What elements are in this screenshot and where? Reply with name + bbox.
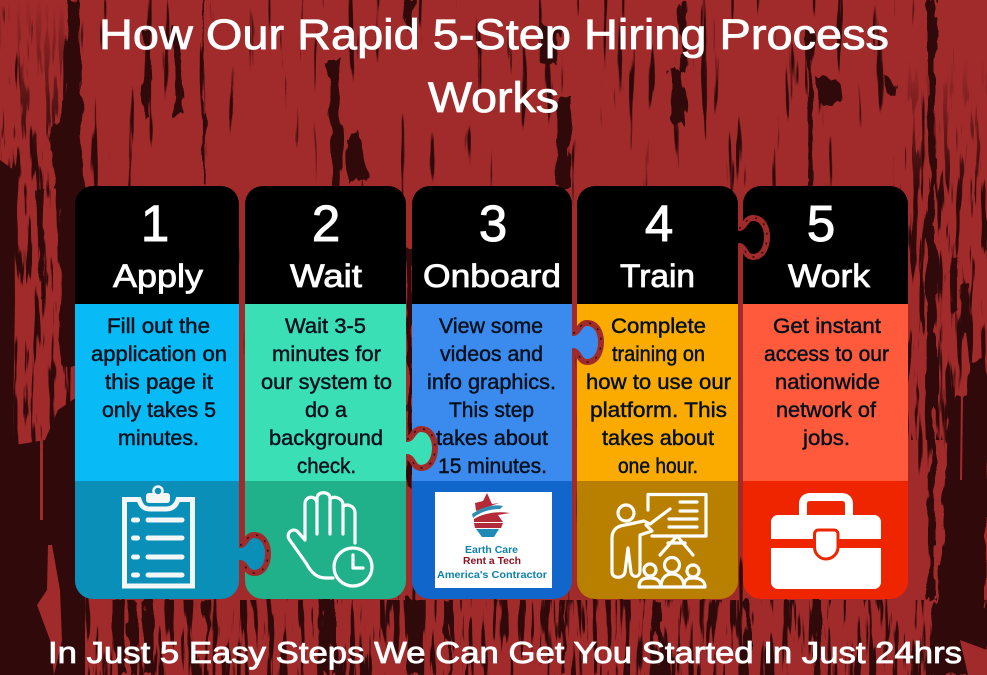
icon: trainer at board with audience [612, 494, 706, 587]
panel 2: wait: do a [305, 399, 347, 422]
panel 4: train: platform. This [590, 399, 727, 422]
panel 5: work: nationwide [775, 371, 880, 394]
icon: company logo: Rent a Tech [463, 555, 521, 567]
panel 3: onboard: videos and [440, 343, 543, 366]
panel 2: wait: minutes for [272, 343, 381, 366]
panel 5: work: Get instant [773, 315, 881, 338]
panel 2: wait: background [269, 427, 383, 450]
panel 2: wait: 2 [312, 195, 340, 252]
panel 2: wait: Wait 3-5 [285, 315, 366, 338]
panel 1: apply: Apply [113, 258, 203, 294]
panel 1: apply: only takes 5 [102, 399, 216, 422]
panel 4: train [577, 186, 738, 599]
icon: toolbox [771, 497, 881, 589]
panel 3: onboard: 15 minutes. [438, 455, 547, 478]
puzzle tab: panel 3 into panel 4 [571, 323, 601, 362]
icon: company logo: America's Contractor [437, 569, 547, 581]
panel 3: onboard: info graphics. [427, 371, 556, 394]
panel 3: onboard: Onboard [423, 258, 561, 294]
panel 4: train: one hour. [618, 455, 698, 478]
panel 3: onboard: takes about [436, 427, 548, 450]
panel 5: work: jobs. [802, 427, 850, 450]
icon: company logo: Earth Care [465, 544, 518, 556]
panel 1: apply: 1 [141, 195, 169, 252]
panel 2: wait [245, 186, 406, 599]
puzzle tab: panel 4 into panel 5 [737, 218, 767, 257]
panel 3: onboard: 3 [479, 195, 507, 252]
puzzle tab: panel 2 into panel 3 [405, 429, 435, 468]
panel 5: work: access to our [764, 343, 889, 366]
panel 5: work: 5 [807, 195, 835, 252]
panel 4: train: Train [620, 258, 695, 294]
panel 3: onboard: This step [449, 399, 534, 422]
panel 4: train: training on [612, 343, 705, 366]
(solid dark band down the left edge) [0, 160, 85, 675]
puzzle tab: panel 1 into panel 2 [238, 535, 268, 573]
panel 4: train: takes about [602, 427, 714, 450]
panel 4: train: 4 [645, 195, 673, 252]
panel 4: train: Complete [611, 315, 706, 338]
panel 1: apply [75, 186, 239, 599]
panel 2: wait: our system to [261, 371, 392, 394]
panel 5: work: network of [776, 399, 876, 422]
panel 1: apply: minutes. [118, 427, 199, 450]
panel 5: work: Work [788, 258, 871, 294]
title [99, 11, 889, 122]
panel 3: onboard: View some [439, 315, 543, 338]
footer tagline: In Just 5 Easy Steps We Can Get You Started In Just 24hrs [48, 635, 962, 670]
panel 4: train: how to use our [586, 371, 731, 394]
panel 2: wait: Wait [290, 258, 362, 294]
icon: clipboard [124, 486, 192, 586]
title: Works [428, 74, 559, 122]
panel 2: wait: check. [297, 455, 356, 478]
icon: company logo [435, 492, 552, 588]
icon: hand with clock [288, 493, 372, 586]
panel 1: apply: this page it [105, 371, 213, 394]
panel 1: apply: Fill out the [107, 315, 210, 338]
panel 5: work [743, 186, 908, 599]
title: How Our Rapid 5-Step Hiring Process [99, 11, 889, 59]
panel 1: apply: application on [91, 343, 227, 366]
panel 3: onboard [412, 186, 572, 599]
